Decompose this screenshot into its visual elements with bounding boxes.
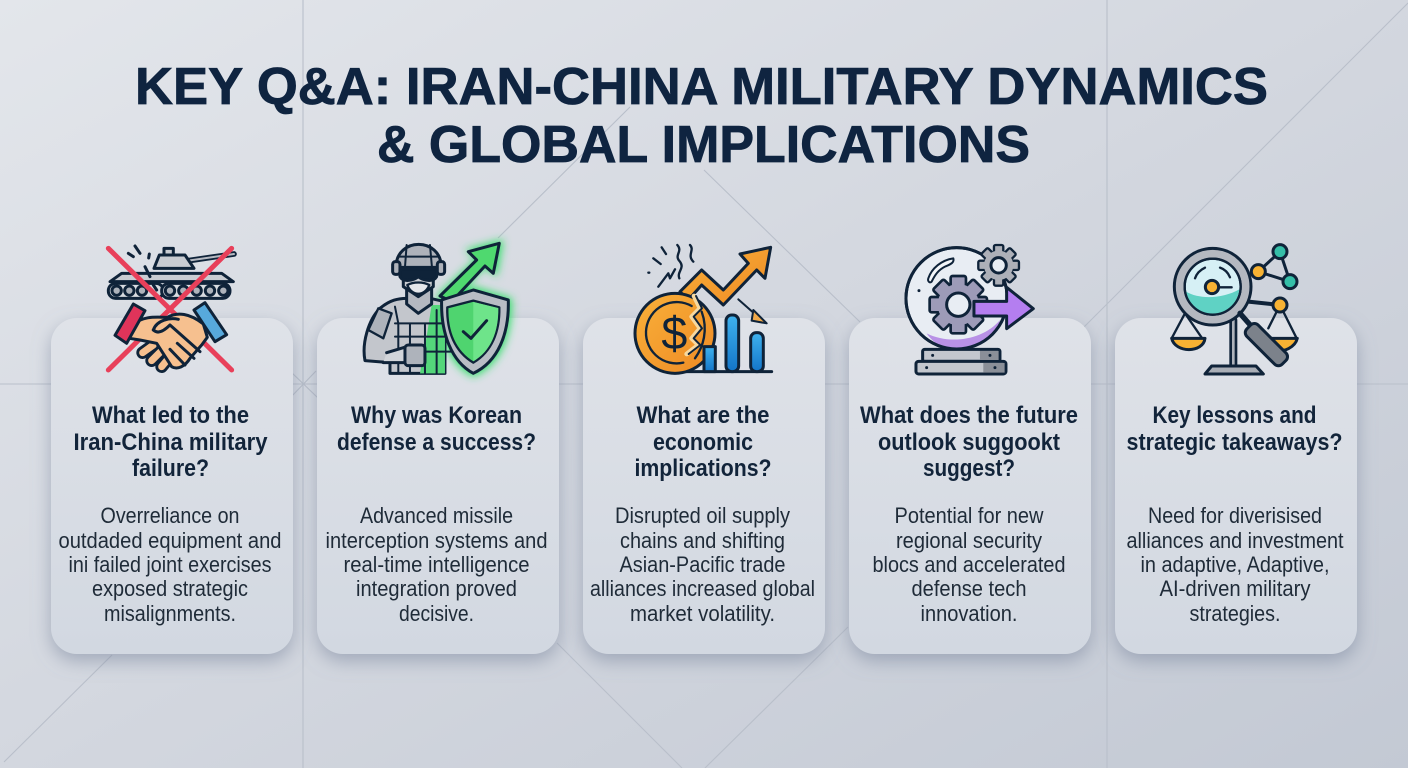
answer: alliances increased global: [590, 576, 815, 601]
icon: cracked coin, rising arrow and bars: [635, 245, 772, 373]
answer: Overreliance on: [100, 503, 240, 528]
card background: [583, 318, 825, 654]
answer: strategies.: [1190, 601, 1280, 626]
answer: in adaptive, Adaptive,: [1140, 552, 1330, 577]
panel: Korean defense: [317, 239, 559, 654]
answer: Asian-Pacific trade: [620, 552, 786, 577]
card background: [1115, 318, 1357, 654]
question: strategic takeaways?: [1126, 429, 1342, 456]
question: Iran-China military: [74, 429, 268, 456]
answer: [590, 503, 815, 626]
answer: Disrupted oil supply: [615, 503, 790, 528]
answer: interception systems and: [326, 528, 548, 553]
question: [1126, 402, 1342, 456]
answer: [872, 503, 1066, 626]
card background: [51, 318, 293, 654]
answer: outdaded equipment and: [58, 528, 282, 553]
answer: [58, 503, 282, 626]
panel: military failure: [51, 246, 293, 654]
question: [860, 402, 1078, 482]
answer: defense tech: [912, 576, 1026, 601]
question: What led to the: [92, 402, 249, 429]
answer: market volatility.: [630, 601, 775, 626]
question: What does the future: [860, 402, 1078, 429]
card background: [849, 318, 1091, 654]
answer: Advanced missile: [360, 503, 513, 528]
answer: ini failed joint exercises: [68, 552, 272, 577]
answer: Need for diverisised: [1148, 503, 1322, 528]
panel: future outlook: [849, 245, 1091, 654]
answer: Potential for new: [894, 503, 1044, 528]
answer: regional security: [896, 528, 1042, 553]
card background: [317, 318, 559, 654]
icon: crossed-out tank and handshake: [108, 246, 234, 370]
panel: key lessons: [1115, 245, 1357, 654]
question: implications?: [634, 455, 772, 482]
question: suggest?: [923, 455, 1015, 482]
question: Key lessons and: [1152, 402, 1316, 429]
answer: alliances and investment: [1126, 528, 1344, 553]
answer: AI-driven military: [1160, 576, 1310, 601]
answer: [326, 503, 548, 626]
icon: soldier with shield and arrow: [364, 239, 512, 377]
question: defense a success?: [337, 429, 536, 456]
answer: real-time intelligence: [344, 552, 530, 577]
question: [74, 402, 268, 482]
answer: blocs and accelerated: [872, 552, 1066, 577]
answer: decisive.: [399, 601, 474, 626]
answer: [1126, 503, 1344, 626]
question: failure?: [132, 455, 209, 482]
question: [337, 402, 536, 456]
answer: misalignments.: [104, 601, 236, 626]
dollar sign: $: [661, 307, 687, 359]
icon: magnifier, scales and network: [1172, 245, 1297, 374]
title: KEY Q&A: IRAN-CHINA MILITARY DYNAMICS: [135, 58, 1268, 116]
question: Why was Korean: [351, 402, 522, 429]
answer: chains and shifting: [620, 528, 785, 553]
panel: economic implications: [583, 245, 825, 654]
question: What are the: [636, 402, 770, 429]
answer: exposed strategic: [92, 576, 248, 601]
question: [634, 402, 772, 482]
title: [135, 58, 1268, 174]
question: outlook suggookt: [878, 429, 1060, 456]
icon: crystal ball with gears and arrow: [906, 245, 1033, 374]
question: economic: [653, 429, 753, 456]
answer: integration proved: [356, 576, 517, 601]
title: & GLOBAL IMPLICATIONS: [377, 116, 1030, 174]
answer: innovation.: [920, 601, 1018, 626]
